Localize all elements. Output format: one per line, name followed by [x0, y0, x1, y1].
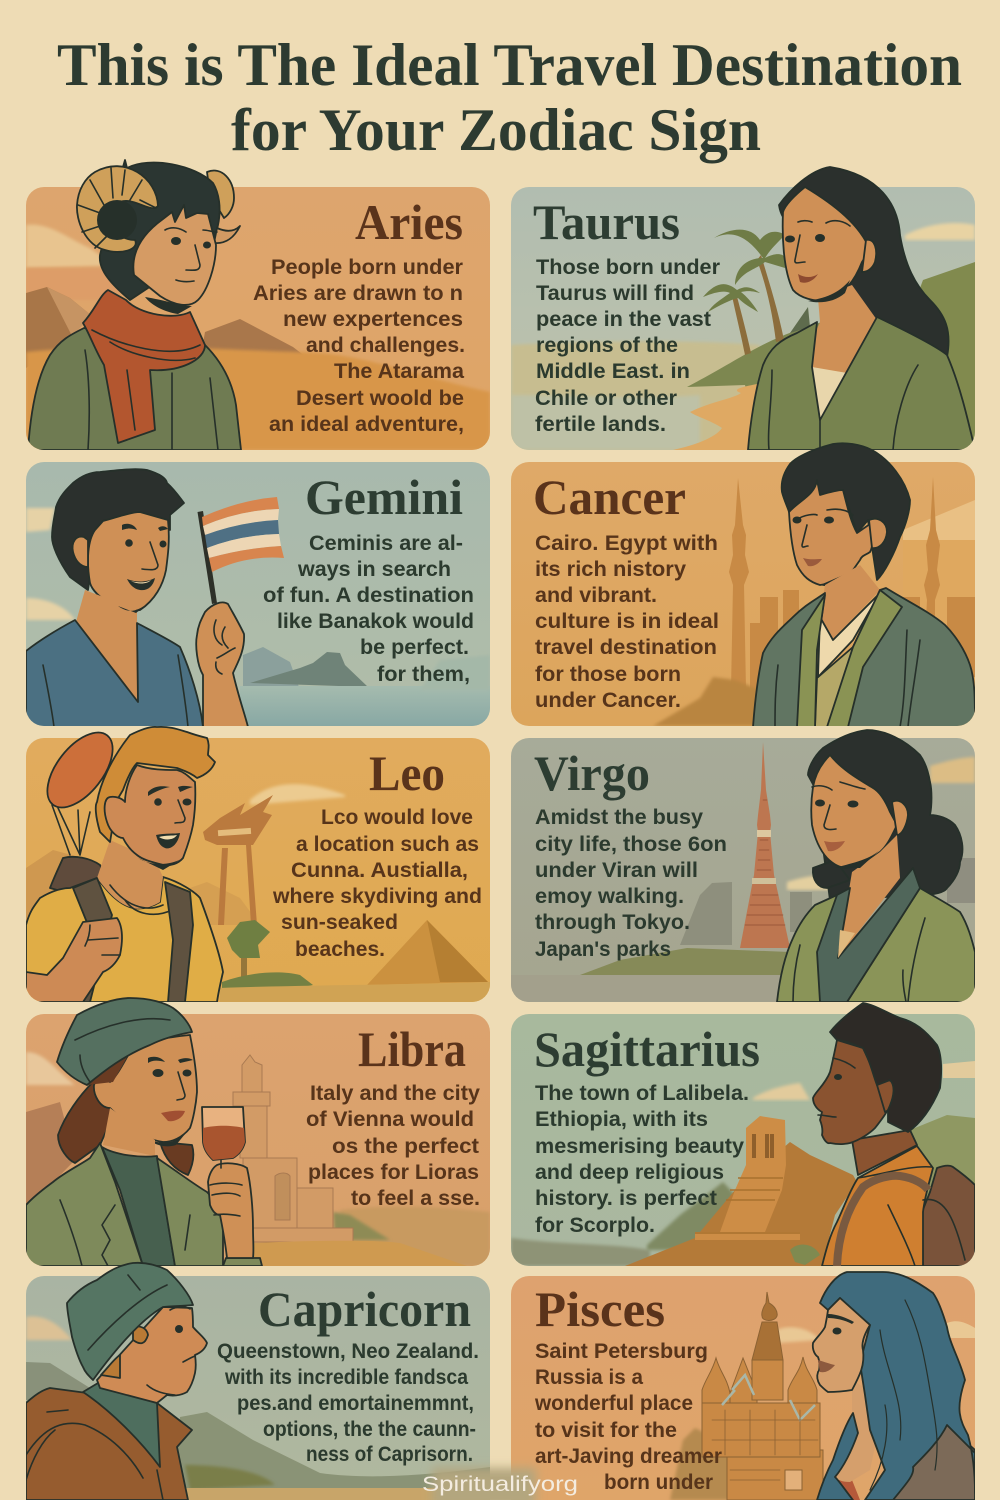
body text — [306, 1082, 480, 1210]
heading: Virgo — [534, 745, 650, 801]
body text: of fun. A destination — [263, 584, 474, 607]
body text: through Tokyo. — [535, 911, 690, 934]
body text: ness of Caprisorn. — [306, 1443, 473, 1466]
body text: under Cancer. — [535, 689, 681, 712]
body text: os the perfect — [332, 1135, 479, 1158]
body text: People born under — [271, 256, 463, 279]
Lalibela rock church scene — [511, 1014, 975, 1266]
body text: Cairo. Egypt with — [535, 532, 718, 555]
character holding wine — [26, 998, 262, 1266]
sea and island scene — [26, 462, 490, 726]
title — [57, 32, 962, 163]
body text: for those born — [535, 663, 681, 686]
character in green beanie — [26, 1263, 207, 1500]
title: for Your Zodiac Sign — [231, 97, 761, 163]
heading: Aries — [355, 194, 463, 250]
body text: city life, those 6on — [535, 833, 727, 856]
heading: Taurus — [533, 194, 680, 250]
body text: Ethiopia, with its — [535, 1108, 708, 1131]
body text: The Atarama — [334, 360, 464, 383]
character with Thai flag — [26, 469, 284, 727]
character with backpack — [813, 1003, 975, 1266]
body text: Aries are drawn to n — [253, 282, 463, 305]
body text: The town of Lalibela. — [535, 1082, 749, 1105]
body text: ways in search — [297, 558, 451, 581]
body text: wonderful place — [534, 1392, 693, 1415]
body text: fertile lands. — [535, 413, 666, 436]
heading: Capricorn — [258, 1281, 471, 1337]
panel: Leo — [26, 721, 490, 1002]
body text: like Banakok would — [277, 610, 474, 633]
body text: with its incredible fandsca — [224, 1366, 468, 1389]
watermark — [422, 1468, 578, 1500]
New Zealand mountain scene — [26, 1276, 490, 1500]
body text: an ideal adventure, — [269, 413, 464, 436]
body text: history. is perfect — [535, 1187, 717, 1210]
character with ram horns — [28, 160, 241, 450]
body text: under Viran will — [535, 859, 698, 882]
character with blue wavy hair — [813, 1272, 975, 1500]
body text: culture is in ideal — [535, 610, 719, 633]
Tokyo tower scene — [511, 738, 975, 1002]
body text: Those born under — [536, 256, 720, 279]
body text: to feel a sse. — [351, 1187, 480, 1210]
panel: Gemini — [26, 462, 490, 727]
body text: sun-seaked — [281, 911, 398, 934]
panel: Taurus — [511, 167, 975, 450]
body text: born under — [604, 1471, 713, 1494]
panel: Capricorn — [26, 1263, 490, 1500]
Cairo skyline scene — [511, 462, 975, 726]
panel: Pisces — [511, 1272, 975, 1500]
character with parachute pack — [26, 721, 223, 1002]
panel: Cancer — [511, 443, 975, 727]
body text: emoy walking. — [535, 885, 684, 908]
body text: a location such as — [296, 833, 479, 856]
panel: Virgo — [511, 730, 975, 1002]
body text: Desert woold be — [296, 387, 464, 410]
heading: Sagittarius — [534, 1021, 760, 1077]
panel: Sagittarius — [511, 1003, 975, 1266]
heading: Cancer — [533, 469, 686, 525]
body text: Queenstown, Neo Zealand. — [217, 1340, 479, 1363]
body text: options, the the caunn- — [263, 1418, 476, 1441]
body text: Cunna. Austialla, — [291, 859, 468, 882]
heading: Leo — [369, 745, 445, 801]
body text — [217, 1340, 479, 1466]
body text: of Vienna would — [306, 1108, 474, 1131]
body text: Chile or other — [535, 387, 677, 410]
body text: beaches. — [295, 938, 385, 961]
character with long dark hair — [748, 167, 975, 450]
body text: Saint Petersburg — [535, 1340, 708, 1363]
body text — [535, 532, 719, 712]
body text — [253, 256, 465, 436]
golden gate and pyramid scene — [26, 738, 490, 1002]
watermark: Spiritualifyorg — [422, 1473, 578, 1496]
body text: and challenges. — [306, 334, 465, 357]
panel: Aries — [26, 160, 490, 450]
heading: Pisces — [535, 1281, 665, 1337]
character in green robe — [753, 443, 975, 727]
desert scene — [26, 187, 490, 450]
body text: for Scorplo. — [535, 1214, 655, 1237]
heading: Gemini — [305, 469, 463, 525]
body text: its rich nistory — [535, 558, 686, 581]
body text: new expertences — [283, 308, 463, 331]
body text: pes.and emortainemmnt, — [237, 1392, 474, 1415]
beach scene with palms — [511, 187, 975, 450]
body text: art-Javing dreamer — [535, 1445, 722, 1468]
body text: and deep religious — [535, 1161, 724, 1184]
body text: travel destination — [535, 636, 717, 659]
body text: Taurus will find — [536, 282, 694, 305]
body text: where skydiving and — [272, 885, 482, 908]
body text: and vibrant. — [535, 584, 657, 607]
panel: Libra — [26, 998, 490, 1266]
body text — [535, 256, 720, 436]
body text: regions of the — [536, 334, 678, 357]
body text — [272, 806, 482, 961]
body text: Russia is a — [535, 1366, 643, 1389]
body text: Italy and the city — [310, 1082, 480, 1105]
Vienna building scene — [26, 1014, 490, 1266]
body text — [535, 1082, 749, 1237]
body text: peace in the vast — [536, 308, 711, 331]
body text: Japan's parks — [535, 938, 671, 961]
Saint Petersburg cathedral scene — [511, 1276, 975, 1500]
body text: be perfect. — [360, 636, 469, 659]
body text: Middle East. in — [536, 360, 690, 383]
body text: Amidst the busy — [535, 806, 703, 829]
body text — [263, 532, 474, 686]
body text: places for Lioras — [308, 1161, 479, 1184]
body text: Ceminis are al- — [309, 532, 463, 555]
body text: mesmerising beauty — [535, 1135, 744, 1158]
heading: Libra — [358, 1021, 466, 1077]
body text — [534, 1340, 722, 1494]
body text: for them, — [377, 663, 470, 686]
body text — [535, 806, 727, 961]
title: This is The Ideal Travel Destination — [57, 32, 962, 98]
body text: to visit for the — [535, 1419, 677, 1442]
character with wavy dark hair — [777, 730, 975, 1002]
body text: Lco would love — [321, 806, 473, 829]
